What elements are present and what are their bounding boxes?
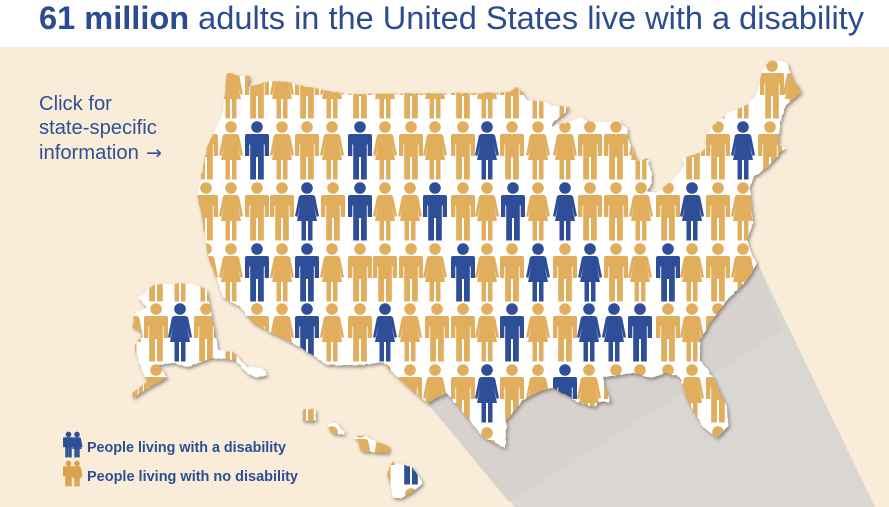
row 6 of people (119, 364, 730, 422)
row 3 of people (194, 182, 755, 240)
legend icon: people with no disability (63, 461, 82, 486)
header band (0, 0, 889, 47)
grey projection beam (423, 262, 875, 507)
click instruction text: Click for (39, 93, 112, 115)
row 1 of people (194, 60, 807, 118)
legend icon: people with a disability (63, 432, 82, 457)
row 2 of people (194, 121, 782, 180)
row 7 of people (328, 426, 724, 484)
head of figure on Hawaii (405, 488, 416, 496)
click instruction text: state-specific (39, 117, 157, 139)
row 4 of people (144, 243, 755, 302)
legend label: no disability: People living with no disability (87, 468, 299, 485)
legend (63, 432, 299, 486)
click instruction text: → (146, 142, 162, 164)
click instruction text: information (39, 142, 139, 164)
row 5 of people (119, 303, 730, 362)
title: 61 million adults in the United States live with a disability (39, 0, 864, 36)
map of the United States filled with people pictograms (119, 50, 820, 507)
legend label: disability: People living with a disability (87, 439, 287, 456)
